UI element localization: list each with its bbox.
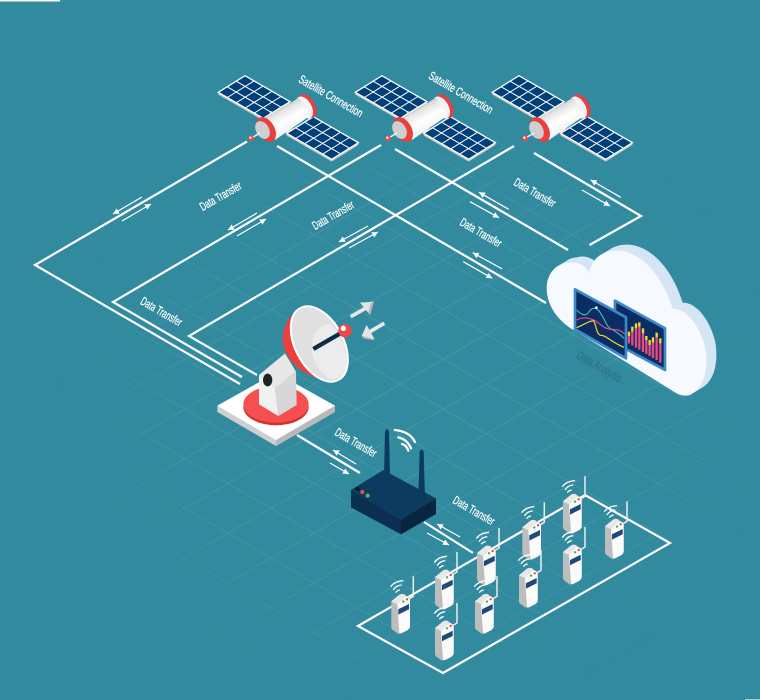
line chart screen (575, 289, 626, 358)
label: data transfer 3: Data Transfer (138, 294, 185, 329)
sensor node 4 (522, 502, 544, 560)
data transfer arrows: satellite 3 to cloud (582, 180, 621, 206)
sensor node 10 (434, 603, 457, 660)
label: satellite connection 1: Satellite Connection (296, 72, 366, 120)
data transfer arrows: satellite 2 to dish (228, 213, 266, 236)
sensor node 8 (518, 550, 541, 608)
faint isometric grid (124, 146, 714, 653)
wireless router (351, 429, 436, 534)
router wifi signal (395, 430, 415, 451)
satellite 2 (355, 76, 495, 162)
sensor node 3 (476, 528, 499, 586)
sensor node 9 (474, 576, 497, 634)
red dish bowl (283, 308, 337, 382)
label: data transfer 4: Data Transfer (511, 175, 558, 210)
signal arrow in (362, 323, 384, 340)
router body (351, 470, 436, 534)
data transfer arrows: satellite 2 to cloud (470, 192, 509, 218)
router status lights (356, 487, 370, 498)
satellite dish (217, 297, 384, 446)
dish base slab (217, 373, 335, 446)
sensor node 6 (604, 501, 627, 559)
sensor node 5 (562, 476, 585, 534)
sensor node 7 (562, 527, 585, 584)
red turntable (243, 386, 309, 425)
connection lines (35, 142, 641, 553)
label: satellite connection 2: Satellite Connection (426, 69, 496, 117)
cloud with data analysis screens (547, 245, 716, 396)
label: data transfer 1: Data Transfer (197, 179, 244, 214)
dish pillar (259, 353, 297, 416)
dish reflector (279, 297, 360, 391)
cloud front face (547, 251, 706, 396)
feed horn ball (338, 324, 352, 337)
label: data transfer 7: Data Transfer (450, 493, 497, 528)
label: data transfer 6: Data Transfer (332, 425, 379, 460)
data transfer arrows: satellite 1 to dish (113, 197, 151, 221)
data transfer arrows: satellite 3 to dish (339, 226, 378, 248)
sensor node 2 (434, 552, 457, 610)
satellite 3 (492, 76, 632, 162)
feed arm (313, 333, 342, 349)
label: data transfer 2: Data Transfer (310, 198, 357, 233)
top-left edge mark (0, 0, 60, 2)
data transfer arrows: dish to router (330, 450, 356, 474)
data transfer arrows: satellite 1 to cloud (463, 253, 502, 278)
router antennas (384, 429, 425, 499)
sensor node 1 (391, 576, 413, 634)
label: data transfer 5: Data Transfer (457, 215, 504, 250)
signal arrow out (351, 302, 374, 317)
satellite 1 (218, 76, 358, 162)
bar chart screen (615, 301, 665, 370)
sensor field boundary (358, 495, 670, 673)
data transfer arrows: router to sensors (427, 524, 460, 545)
label: data analysis: Data Analysis (574, 348, 625, 385)
cloud back extrusion (552, 245, 716, 393)
bottom-right edge mark (745, 699, 760, 700)
